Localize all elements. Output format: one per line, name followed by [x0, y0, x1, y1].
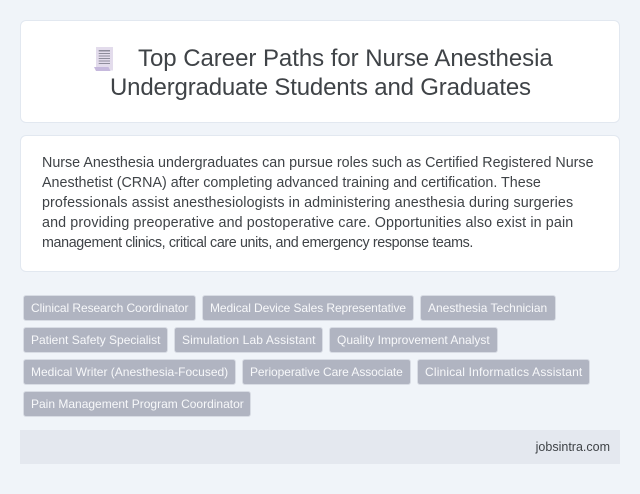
tag	[23, 327, 168, 353]
tag: Medical Device Sales Representative	[210, 301, 406, 315]
text block: description: Nurse Anesthesia undergraduates can pursue roles such as Certified Registered Nurse	[42, 155, 594, 171]
heading: title line 1: Top Career Paths for Nurse Anesthesia	[138, 45, 553, 72]
footer bar	[20, 430, 620, 464]
text block: description: professionals assist anesthesiologists in administering anesthesia during surgeries	[42, 195, 573, 211]
tag: Anesthesia Technician	[428, 301, 547, 315]
tag: Patient Safety Specialist	[31, 333, 160, 347]
tag	[174, 327, 323, 353]
panel: title card	[20, 20, 620, 123]
tag	[417, 359, 590, 385]
tag	[420, 295, 556, 321]
tag: Simulation Lab Assistant	[182, 333, 316, 347]
tag: Perioperative Care Associate	[250, 365, 403, 379]
tag: Quality Improvement Analyst	[337, 333, 490, 347]
tag	[242, 359, 411, 385]
footer: source: jobsintra.com	[536, 440, 610, 454]
panel: description card	[20, 135, 620, 272]
tag	[329, 327, 498, 353]
tag	[23, 359, 236, 385]
tag	[23, 295, 196, 321]
tag: Medical Writer (Anesthesia-Focused)	[31, 365, 228, 379]
tag	[202, 295, 414, 321]
heading: title line 2: Undergraduate Students and Graduates	[110, 74, 531, 101]
tag: Pain Management Program Coordinator	[31, 397, 244, 411]
text block: description	[42, 155, 594, 251]
text block: description: and providing preoperative and postoperative care. Opportunities also exist in pain	[42, 215, 573, 231]
tag: Clinical Informatics Assistant	[425, 365, 582, 379]
tags: career paths	[23, 295, 590, 417]
tag	[23, 391, 251, 417]
icon: document scroll	[94, 47, 113, 71]
text block: description: management clinics, critical care units, and emergency response teams.	[42, 235, 473, 251]
text block: description: Anesthetist (CRNA) after completing advanced training and certification. These	[42, 175, 541, 191]
tag: Clinical Research Coordinator	[31, 301, 188, 315]
